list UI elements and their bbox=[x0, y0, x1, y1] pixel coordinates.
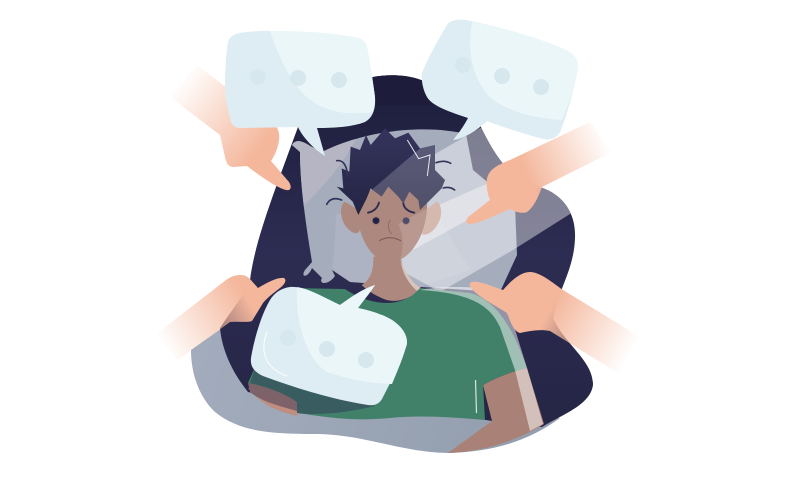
background blob: dark hair-like backdrop bbox=[220, 75, 593, 427]
face bbox=[355, 180, 427, 263]
neck bbox=[362, 257, 422, 301]
stray hair strands bbox=[327, 161, 455, 204]
speech bubble: top left bbox=[225, 31, 375, 156]
neck highlight bbox=[401, 260, 422, 291]
nose and mouth bbox=[388, 220, 392, 234]
man's head, neck and hair bbox=[327, 128, 455, 301]
pointing hand: top right bbox=[466, 122, 612, 224]
glass reflection: shoulder strip bbox=[420, 287, 543, 431]
background blob: grey-blue base bbox=[191, 328, 560, 453]
pointing hand: bottom right bbox=[470, 272, 642, 373]
pointing hand: bottom left bbox=[155, 275, 285, 360]
hair reflection bbox=[372, 145, 445, 210]
hair bbox=[337, 128, 445, 215]
face reflection bbox=[398, 208, 427, 261]
pillow bbox=[292, 129, 517, 290]
speech bubble: bottom bbox=[251, 285, 407, 405]
green t-shirt bbox=[248, 288, 527, 420]
eyes bbox=[372, 216, 380, 225]
illustration: anxious man surrounded by pointing hands and speech bubbles bbox=[162, 20, 634, 453]
eyebrows bbox=[368, 203, 414, 213]
bubble shadow on shirt bbox=[250, 368, 375, 414]
pointing hand: top left bbox=[170, 65, 291, 190]
glass reflection: diagonal beams bbox=[401, 128, 570, 290]
hair highlight bbox=[407, 140, 430, 176]
ears bbox=[341, 202, 360, 233]
shirt highlight bbox=[476, 380, 477, 413]
speech bubble: top right bbox=[422, 20, 578, 140]
man's arms bbox=[248, 368, 544, 453]
